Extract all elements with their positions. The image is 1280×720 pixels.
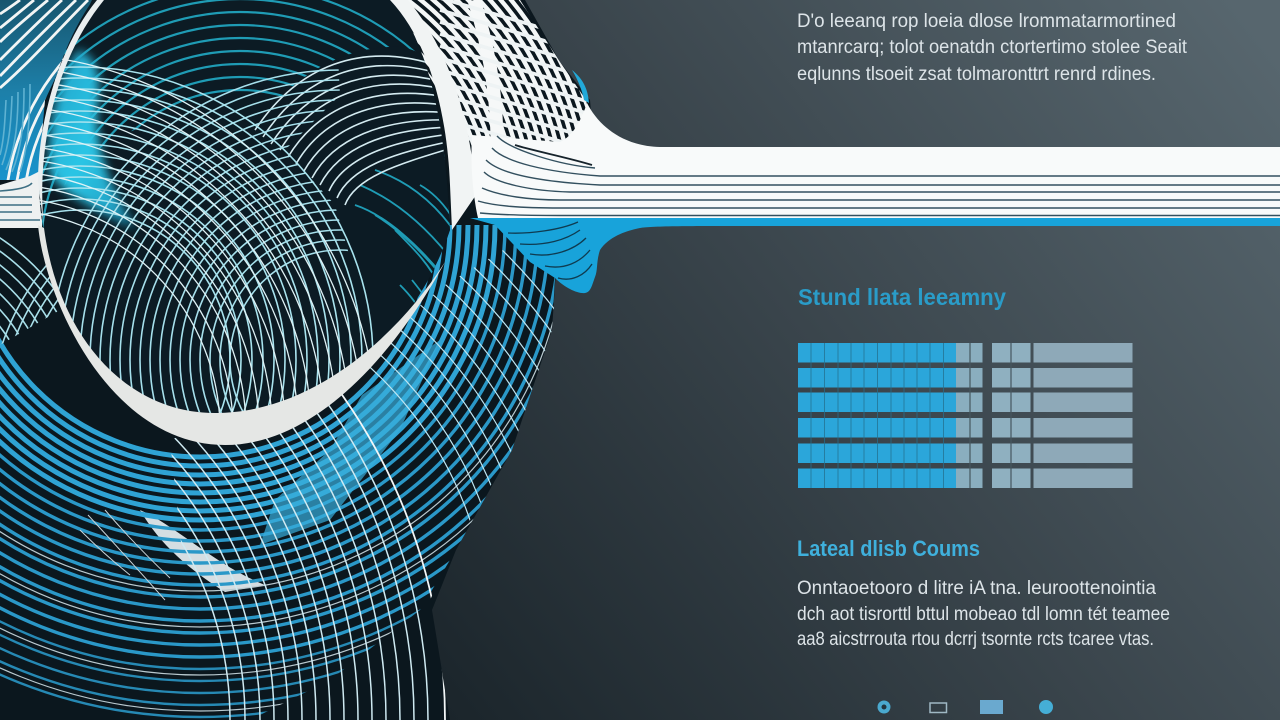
heading: lower section: Lateal dlisb Coums [797, 536, 980, 561]
white smear [140, 510, 265, 592]
lower text block: aa8 aicstrrouta rtou dcrrj tsornte rcts tcaree vtas. [797, 629, 1154, 650]
blue band flare [470, 218, 1280, 293]
steep white arcs [40, 58, 368, 413]
silver slivers [80, 510, 170, 600]
dark slivers in flare [515, 145, 592, 165]
outer blue concentric arcs [0, 225, 555, 718]
blue flare slits [508, 222, 592, 279]
top-right white mesh [408, 0, 587, 146]
hump arcs [255, 56, 452, 205]
icon: ring dot [878, 700, 890, 714]
pagination icons [878, 700, 1053, 714]
top-left white stripes [0, 0, 92, 180]
lower text block [797, 578, 1170, 650]
white band and flare [471, 103, 1280, 218]
intro text block [797, 11, 1188, 85]
band stripe lines [478, 136, 1280, 216]
cyan glow [49, 50, 135, 228]
white ring: bottom crescent [38, 225, 445, 445]
heading: data summary: Stund llata leeamny [798, 284, 1006, 310]
left mesh below stripes [0, 237, 58, 345]
left white stripes [0, 170, 42, 228]
grey middle cells [992, 343, 1030, 488]
table of bars [798, 343, 1132, 488]
intro text block: eqlunns tlsoeit zsat tolmaronttrt renrd rdines. [797, 64, 1156, 85]
teal right lines [355, 170, 452, 315]
mesh arcs falling right [39, 66, 374, 413]
inner dark circle with line meshes [39, 0, 450, 413]
lower text block: dch aot tisrorttl bttul mobeao tdl lomn tét teamee [797, 604, 1170, 625]
cell dividers [811, 343, 944, 488]
intro text block: mtanrcarq; tolot oenatdn ctortertimo stolee Seait [797, 37, 1188, 58]
icon: solid dot [1039, 700, 1053, 714]
grey short cells [956, 343, 982, 488]
blue cells [798, 343, 956, 488]
bright blue patch [260, 340, 440, 545]
icon: filled rectangle [980, 700, 1003, 714]
intro text block: D'o leeanq rop loeia dlose lrommatarmortined [797, 11, 1176, 32]
white ring: right strand [390, 0, 476, 230]
flare blue edge [572, 70, 589, 103]
white lower grid arcs [172, 394, 446, 720]
lower text block: Onntaoetooro d litre iA tna. leuroottenointia [797, 578, 1156, 599]
mesh arcs rising right [58, 69, 348, 413]
icon: outline rectangle [930, 703, 946, 712]
upper right grid over blue arcs [370, 250, 554, 521]
dark artwork base [0, 0, 600, 720]
teal top arcs [42, 0, 450, 294]
grey wide cells [1034, 343, 1132, 488]
dark cover for middle [40, 47, 455, 420]
white ring: left strand [38, 0, 104, 228]
